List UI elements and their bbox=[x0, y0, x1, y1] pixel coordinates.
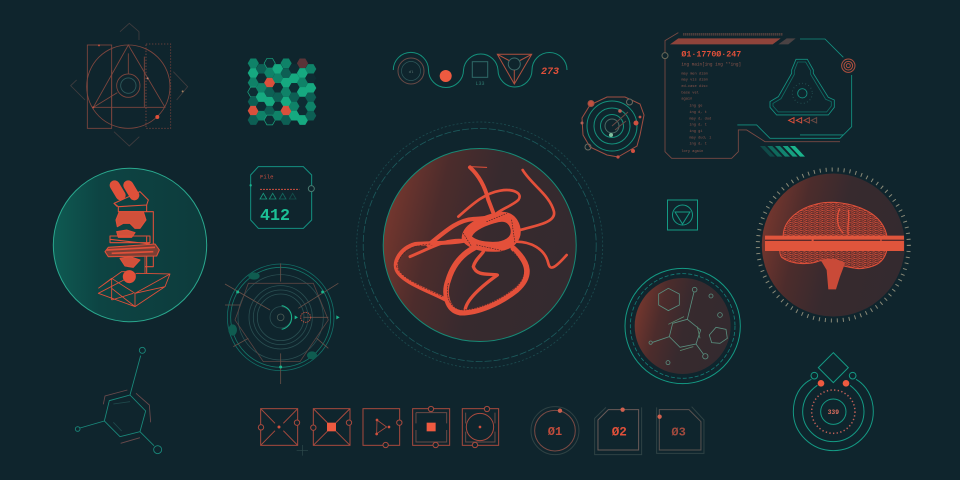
badge 01: Ø1 bbox=[548, 425, 562, 439]
triangle button bbox=[668, 200, 698, 230]
bottom icon row bbox=[258, 406, 704, 456]
terminal text: ing ge bbox=[689, 104, 703, 109]
molecule structure bbox=[649, 287, 727, 365]
sacred geometry diagram bbox=[71, 23, 188, 146]
radar scope bbox=[225, 263, 340, 384]
terminal text: ing main[ing ing **ing] bbox=[681, 63, 741, 68]
stripes bbox=[760, 146, 805, 157]
brain sphere bbox=[758, 170, 909, 320]
truncated triangle emblem bbox=[770, 59, 834, 115]
file card: File bbox=[260, 174, 274, 181]
icon: envelope with dot bbox=[258, 409, 300, 445]
terminal text: ing d, t bbox=[689, 142, 707, 147]
target gauge: 339 bbox=[828, 409, 839, 416]
badge 03: Ø3 bbox=[671, 425, 686, 439]
terminal text: lory again bbox=[681, 149, 703, 154]
icon: square target bbox=[413, 406, 450, 448]
wave control strip: 273 bbox=[541, 67, 559, 78]
icon: envelope with square bbox=[311, 409, 352, 445]
wave control strip bbox=[393, 52, 567, 88]
terminal text bbox=[681, 50, 741, 154]
concentric node bbox=[842, 59, 855, 72]
badge 03 bbox=[657, 407, 704, 453]
central worm sphere bbox=[357, 122, 603, 368]
target gauge bbox=[793, 353, 873, 451]
hexagon heat map bbox=[248, 58, 316, 125]
badge 02: Ø2 bbox=[612, 425, 627, 440]
microscope bbox=[98, 185, 170, 307]
terminal text: ing gi bbox=[689, 129, 703, 134]
orbital diagram bbox=[580, 97, 644, 159]
terminal text: may dud, i bbox=[689, 135, 712, 140]
terminal text: Ø1·1770Ø·247 bbox=[681, 50, 741, 60]
brain bbox=[765, 202, 904, 289]
terminal text: ing d, t bbox=[689, 123, 707, 128]
wave control strip: dl bbox=[409, 70, 414, 75]
terminal text: may d, dud bbox=[689, 116, 711, 121]
file card bbox=[249, 167, 314, 228]
arrows bbox=[789, 118, 817, 123]
microscope sphere bbox=[53, 168, 207, 322]
icon: circle target bbox=[462, 406, 499, 448]
file card: 412 bbox=[260, 207, 290, 226]
wave control strip: L33 bbox=[475, 81, 485, 87]
terminal text: again bbox=[681, 97, 692, 102]
icon: triangle nodes bbox=[363, 409, 402, 448]
terminal text: base vel bbox=[681, 90, 699, 95]
badge 01 bbox=[531, 407, 579, 455]
badge 02 bbox=[595, 407, 642, 455]
terminal text: may men dism bbox=[681, 71, 708, 76]
terminal text: ed-case disc bbox=[681, 84, 708, 89]
parasite bbox=[396, 167, 567, 313]
small molecule bbox=[75, 347, 162, 454]
terminal text: may vis dism bbox=[681, 78, 708, 83]
terminal text: ing d, t bbox=[689, 110, 707, 115]
data terminal panel bbox=[662, 33, 855, 158]
header bars bbox=[670, 34, 796, 44]
scan band bbox=[765, 236, 904, 251]
molecule sphere bbox=[625, 268, 740, 384]
